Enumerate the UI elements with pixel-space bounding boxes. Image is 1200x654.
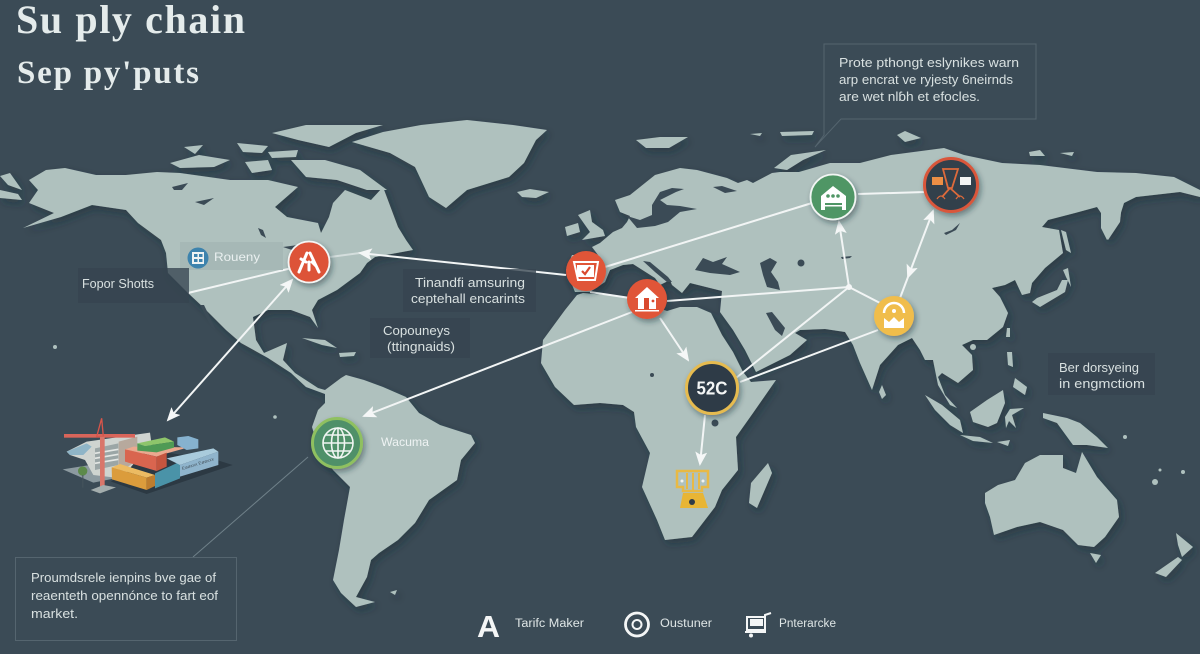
icon: globe hub (312, 418, 362, 468)
world map land masses (0, 120, 1200, 607)
icon: red North America hub (288, 242, 330, 282)
icon: red North Africa hub (627, 279, 667, 319)
legend (477, 609, 836, 644)
illustration: warehouse with containers and crane (63, 418, 233, 494)
legend: tariff marker (477, 609, 584, 644)
inland seas and lakes (172, 183, 960, 426)
legend: tariff marker: Tarifc Maker (515, 618, 584, 630)
label: Ber dorsyeing: in engmctiom (1059, 376, 1145, 391)
callout: top right: arp encrat ve ryjesty 6neirnds (839, 72, 1014, 87)
legend: preference cart: Pnterarcke (779, 618, 836, 630)
legend: customer: Oustuner (660, 618, 712, 630)
label: Copouneys: (ttingnaids) (387, 339, 455, 354)
callout: bottom left: Proumdsrele ienpins bve gae of (31, 570, 216, 585)
label: Copouneys: Copouneys (383, 323, 450, 338)
label: Thandfi amsuring: ceptehall encarints (411, 291, 526, 306)
illustration: warehouse with containers and crane: Eøøxxx Eøøxxx (181, 456, 215, 471)
label: Thandfi amsuring (403, 269, 536, 312)
label: Fopor Shotts: Fopor Shotts (82, 276, 154, 291)
label: Fopor Shotts (78, 268, 189, 303)
icon: 52C hub (686, 362, 738, 414)
legend: tariff marker: A (477, 609, 500, 644)
label: Thandfi amsuring: Tinandfi amsuring (415, 275, 525, 290)
icon: gold lab trophy (677, 471, 708, 508)
label: Roueny: Roueny (214, 252, 260, 264)
icon: 52C hub: 52C (696, 378, 728, 398)
label: Roueny (180, 242, 283, 270)
callout: bottom left (16, 558, 236, 640)
label: Copouneys (370, 318, 470, 358)
icon: dark crane hub (924, 158, 978, 212)
callout: bottom left: reaenteth opennónce to fart eof (31, 588, 218, 603)
callout: top right: Prote pthongt eslynikes warn (839, 55, 1019, 70)
legend: customer (626, 613, 712, 636)
icon: red Iberia hub (566, 251, 606, 291)
legend: preference cart (745, 613, 836, 638)
label: Wacuma: Wacuma (381, 435, 429, 449)
callout: bottom left: market. (31, 606, 78, 621)
callout: top right: are wet nlɓh et efocles. (839, 89, 980, 104)
label: Ber dorsyeing (1048, 353, 1155, 395)
icon: green warehouse hub (810, 174, 856, 220)
subtitle: Sep py'puts (17, 55, 199, 91)
icon: yellow hub (874, 296, 914, 336)
callout: top right (815, 44, 1036, 147)
route lines and arrows (168, 192, 933, 557)
label: Ber dorsyeing: Ber dorsyeing (1059, 360, 1139, 375)
